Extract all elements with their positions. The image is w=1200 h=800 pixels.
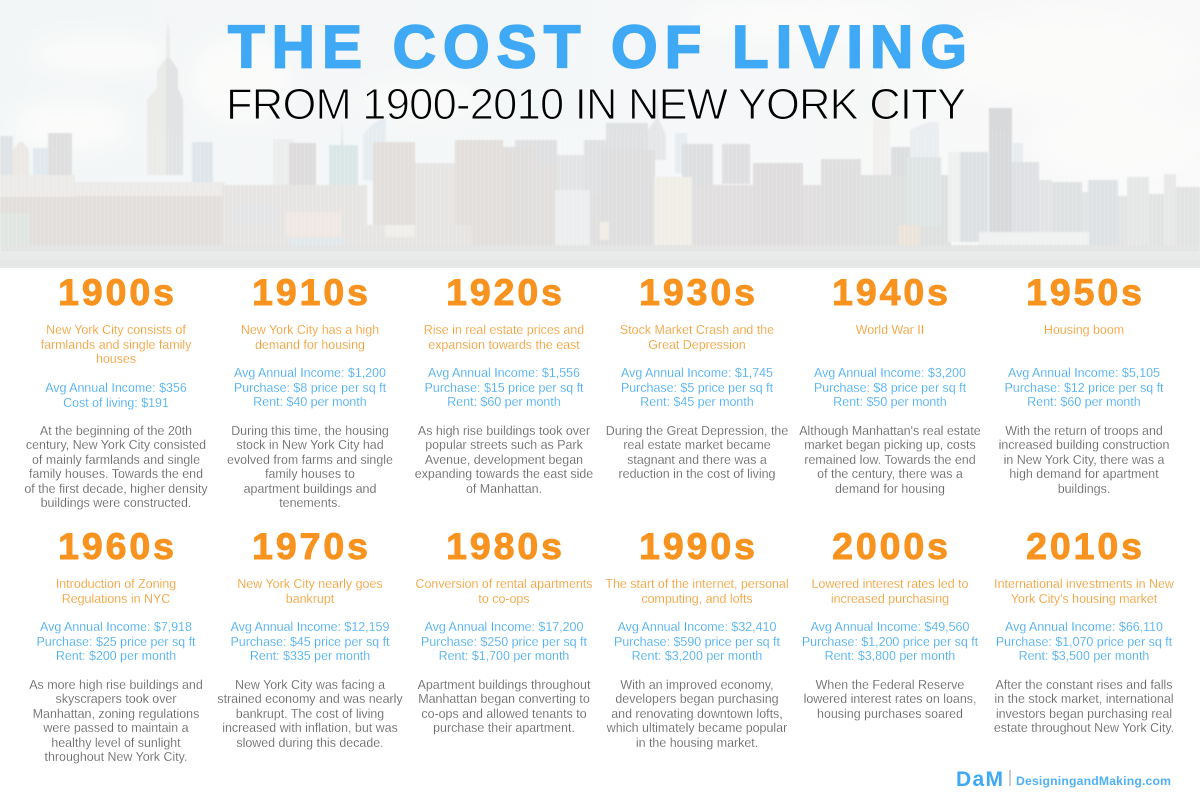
description: skyscrapers took over [56,692,176,706]
subheading: Stock Market Crash and the [620,323,774,337]
description [415,424,593,496]
description: Manhattan began converting to [418,692,590,706]
stats: Avg Annual Income: $1,745 [621,366,773,380]
stats: Purchase: $15 price per sq ft [424,380,584,394]
stats: Rent: $335 per month [250,649,370,663]
year heading: 1930s [639,271,758,313]
year heading: 1960s [58,525,177,567]
description: During this time, the housing [231,424,389,438]
description: reduction in the cost of living [619,467,775,481]
footer logo [950,762,1180,792]
description: Avenue, development began [425,452,583,466]
subheading [40,323,192,366]
description: buildings. [1058,482,1110,496]
stats: Avg Annual Income: $5,105 [1008,366,1160,380]
footer logo: DaM [956,768,1003,791]
stats: Rent: $3,800 per month [825,649,955,663]
description: estate throughout New York City. [994,721,1174,735]
description: of the first decade, higher density [24,482,208,496]
stats [421,620,587,663]
subheading [793,577,987,606]
year heading: 2000s [832,525,951,567]
panel: 1990s [605,525,789,750]
description: in the stock market, international [994,692,1174,706]
description: strained economy and was nearly [217,692,403,706]
subheading: Conversion of rental apartments [416,577,592,591]
subheading: demand for housing [255,338,365,352]
title: THE COST OF LIVING [228,14,967,80]
description: of Manhattan. [466,482,542,496]
header: skyline photo background [0,0,1200,268]
description: With the return of troops and [1005,424,1163,438]
subheading [987,577,1181,606]
footer logo: DesigningandMaking.com [1016,774,1171,788]
year heading: 1980s [446,525,565,567]
subheading: Lowered interest rates led to [812,577,968,591]
description: in the housing market. [636,736,758,750]
description: which ultimately became popular [607,721,787,735]
description [606,424,788,481]
description: slowed during this decade. [236,736,384,750]
stats: Rent: $40 per month [253,395,367,409]
stats [1004,366,1164,409]
description [418,678,590,735]
stats: Purchase: $8 price per sq ft [234,380,386,394]
description [987,678,1181,736]
panel: 1940s [799,271,981,496]
description: healthy level of sunlight [51,736,181,750]
year heading: 1970s [252,525,371,567]
description: purchase their apartment. [433,721,575,735]
panel: 1970s [217,525,403,750]
panel: 1910s [227,271,393,510]
description [227,424,393,510]
description: in New York City, there was a [1004,452,1164,466]
stats [230,620,390,663]
stats: Avg Annual Income: $12,159 [231,620,389,634]
stats [793,620,987,664]
stats: Rent: $1,700 per month [439,649,569,663]
panel: 1930s [606,271,788,481]
stats: Rent: $60 per month [1027,395,1141,409]
description: popular streets such as Park [425,438,583,452]
subheading [56,577,176,606]
stats: Purchase: $25 price per sq ft [36,634,196,648]
description: evolved from farms and single [227,452,393,466]
panel: 2010s [988,522,1182,772]
subheading [605,577,789,606]
subheading [424,323,584,352]
panel: 1920s [415,271,593,496]
description [793,678,987,721]
stats: Avg Annual Income: $7,918 [40,620,192,634]
subheading: World War II [856,323,924,337]
stats [987,620,1181,664]
stats: Purchase: $8 price per sq ft [814,380,966,394]
subheading: increased purchasing [831,592,949,606]
stats: Purchase: $12 price per sq ft [1004,380,1164,394]
description: lowered interest rates on loans, [804,692,976,706]
subheading: houses [96,352,136,366]
description [799,424,981,496]
stats: Avg Annual Income: $49,560 [811,620,969,634]
subtitle: FROM 1900-2010 IN NEW YORK CITY [226,81,966,129]
subheading: Housing boom [1044,323,1124,337]
subheading: York City's housing market [1011,592,1157,606]
description [29,678,203,764]
description: real estate market became [623,438,771,452]
year heading: 1940s [832,271,951,313]
description: During the Great Depression, the [606,424,788,438]
stats [614,620,780,663]
stats: Avg Annual Income: $32,410 [618,620,776,634]
subheading [237,577,383,606]
subheading [416,577,592,606]
description: buildings were constructed. [41,496,191,510]
year heading: 1900s [58,271,177,313]
description: apartment buildings and [244,482,376,496]
description: increased with inflation, but was [222,721,398,735]
description: co-ops and allowed tenants to [421,706,587,720]
stats: Purchase: $250 price per sq ft [421,634,587,648]
description [217,678,403,750]
subheading: Great Depression [648,338,746,352]
stats [424,366,584,409]
year heading: 2010s [1026,525,1145,567]
description: With an improved economy, [620,678,774,692]
description: family houses. Towards the end [29,467,203,481]
description: After the constant rises and falls [996,678,1172,692]
stats [234,366,386,409]
stats: Purchase: $45 price per sq ft [230,634,390,648]
description: market began picking up, costs [804,438,976,452]
stats: Purchase: $1,070 price per sq ft [996,634,1172,648]
description: Manhattan, zoning regulations [33,706,199,720]
stats: Rent: $3,200 per month [632,649,762,663]
stats: Rent: $60 per month [447,395,561,409]
description: of mainly farmlands and single [32,452,200,466]
description: throughout New York City. [45,750,187,764]
stats: Purchase: $590 price per sq ft [614,634,780,648]
description: stock in New York City had [236,438,384,452]
stats: Avg Annual Income: $3,200 [814,366,966,380]
description: increased building construction [999,438,1169,452]
description: When the Federal Reserve [816,678,964,692]
description: As high rise buildings took over [418,424,590,438]
description: and renovating downtown lofts, [611,706,783,720]
description: demand for housing [835,482,945,496]
description: remained low. Towards the end [804,452,976,466]
subheading: to co-ops [478,592,530,606]
subheading: New York City consists of [46,323,186,337]
year heading: 1950s [1026,271,1145,313]
stats: Avg Annual Income: $1,200 [234,366,386,380]
stats: Rent: $50 per month [833,395,947,409]
description: expanding towards the east side [415,467,593,481]
subheading: computing, and lofts [641,592,753,606]
description: housing purchases soared [817,706,963,720]
subheading: Introduction of Zoning [56,577,176,591]
subheading: Regulations in NYC [62,592,170,606]
stats: Rent: $3,500 per month [1019,649,1149,663]
description: As more high rise buildings and [29,678,203,692]
stats: Avg Annual Income: $356 [45,381,187,395]
description: stagnant and there was a [627,452,767,466]
subheading: International investments in New [994,577,1174,591]
panel: 1950s [999,271,1169,496]
description: Apartment buildings throughout [418,678,590,692]
description [999,424,1169,496]
stats: Purchase: $1,200 price per sq ft [802,634,978,648]
stats [814,366,966,409]
stats [621,366,773,409]
stats [36,620,196,663]
panel: 1980s [416,525,592,735]
stats: Avg Annual Income: $66,110 [1005,620,1163,634]
subheading: New York City has a high [241,323,379,337]
description: New York City was facing a [235,678,385,692]
description: bankrupt. The cost of living [236,706,384,720]
description: investors began purchasing real [996,706,1172,720]
subheading: bankrupt [286,592,334,606]
subheading: New York City nearly goes [237,577,383,591]
panel: 2000s [794,522,988,772]
description: Although Manhattan's real estate [799,424,981,438]
panel: 1960s [29,525,203,764]
description: At the beginning of the 20th [40,424,192,438]
description: of the century, there was a [817,467,963,481]
description: family houses to [265,467,355,481]
description: high demand for apartment [1009,467,1159,481]
stats: Avg Annual Income: $17,200 [425,620,583,634]
stats: Cost of living: $191 [63,396,169,410]
description: developers began purchasing [615,692,779,706]
description [24,424,208,510]
description: tenements. [279,496,341,510]
subheading: expansion towards the east [428,338,580,352]
year heading: 1920s [446,271,565,313]
description: were passed to maintain a [43,721,189,735]
stats: Purchase: $5 price per sq ft [621,380,773,394]
subheading [620,323,774,352]
stats: Rent: $45 per month [640,395,754,409]
subheading [241,323,379,352]
year heading: 1910s [252,271,371,313]
stats [45,381,187,410]
panel: 1900s [24,271,208,510]
year heading: 1990s [639,525,758,567]
subheading: farmlands and single family [41,338,191,352]
subheading: The start of the internet, personal [605,577,789,591]
stats: Avg Annual Income: $1,556 [428,366,580,380]
description [600,678,794,750]
subheading: Rise in real estate prices and [424,323,584,337]
stats: Rent: $200 per month [56,649,176,663]
description: century, New York City consisted [26,438,206,452]
